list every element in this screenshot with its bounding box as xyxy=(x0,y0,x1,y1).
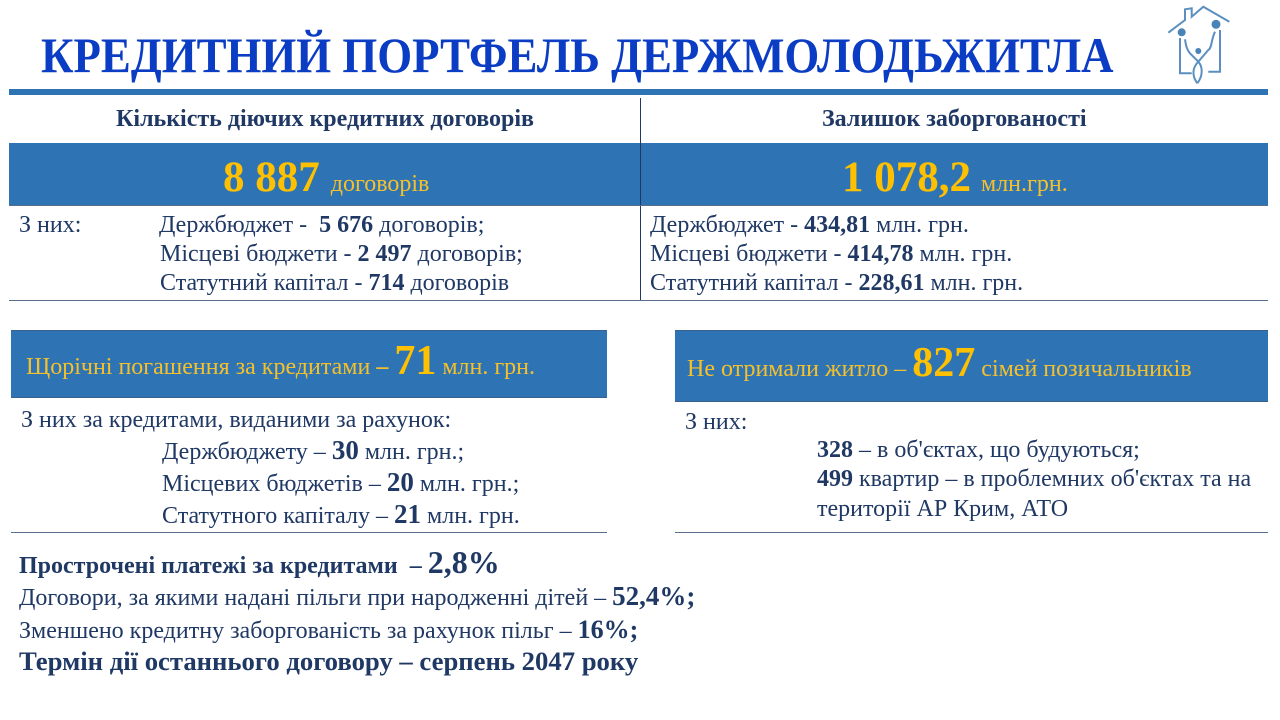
list: repayment breakdown: Держбюджету – 30 млн. грн.; xyxy=(162,435,464,465)
list: contract breakdown: Місцеві бюджети - 2 497 договорів; xyxy=(160,241,523,267)
panel: outstanding debt xyxy=(641,106,1268,296)
title: КРЕДИТНИЙ ПОРТФЕЛЬ ДЕРЖМОЛОДЬЖИТЛА xyxy=(41,27,1114,83)
list: families breakdown: 499 квартир – в проблемних об'єктах та на xyxy=(817,466,1251,492)
list: repayment breakdown: Статутного капіталу – 21 млн. грн. xyxy=(162,499,520,529)
list: contract breakdown xyxy=(159,212,523,296)
header rule xyxy=(9,89,1268,95)
list: repayment breakdown xyxy=(162,435,520,529)
band: annual repayments xyxy=(11,330,607,398)
heading: contracts: Кількість діючих кредитних договорів xyxy=(116,106,534,132)
list: repayment breakdown: Місцевих бюджетів – 20 млн. грн.; xyxy=(162,467,519,497)
band: families xyxy=(675,330,1268,402)
divider between top panels xyxy=(640,98,641,301)
list: debt breakdown xyxy=(650,212,1023,296)
icon: house with family logo xyxy=(1168,6,1230,84)
band: total debt xyxy=(641,143,1268,205)
list: debt breakdown: Статутний капітал - 228,61 млн. грн. xyxy=(650,270,1023,296)
heading: debt: Залишок заборгованості xyxy=(822,106,1087,132)
text: debt reduced: Зменшено кредитну заборгованість за рахунок пільг – 16%; xyxy=(19,615,638,644)
value: total debt: 1 078,2 млн.грн. xyxy=(842,154,1068,201)
list: contract breakdown: Статутний капітал - 714 договорів xyxy=(160,270,509,296)
panel: families without housing xyxy=(675,330,1268,533)
list: contract breakdown: Держбюджет - 5 676 договорів; xyxy=(159,212,484,238)
band: total contracts xyxy=(9,143,641,205)
list: families breakdown: території АР Крим, АТО xyxy=(817,496,1068,522)
text block: summary xyxy=(19,544,695,676)
value: families: Не отримали житло – 827 сімей позичальників xyxy=(687,340,1192,386)
list: debt breakdown: Місцеві бюджети - 414,78 млн. грн. xyxy=(650,241,1012,267)
list: families breakdown: 328 – в об'єктах, що будуються; xyxy=(817,437,1140,463)
text: benefits at childbirth: Договори, за якими надані пільги при народженні дітей – 52,4%; xyxy=(19,581,695,611)
label: of which: З них: xyxy=(19,212,81,238)
list: debt breakdown: Держбюджет - 434,81 млн. грн. xyxy=(650,212,969,238)
text: last contract term: Термін дії останнього договору – серпень 2047 року xyxy=(19,646,638,676)
panel: annual repayments xyxy=(11,330,607,533)
value: annual repayments: Щорічні погашення за кредитами – 71 млн. грн. xyxy=(26,338,535,384)
label: of which: З них: xyxy=(685,409,747,435)
panel: contracts count xyxy=(9,106,640,296)
list: families breakdown xyxy=(817,437,1251,522)
text: overdue payments: Прострочені платежі за кредитами – 2,8% xyxy=(19,544,500,580)
text: repayment intro: З них за кредитами, виданими за рахунок: xyxy=(21,407,451,433)
value: total contracts: 8 887 договорів xyxy=(223,154,429,201)
